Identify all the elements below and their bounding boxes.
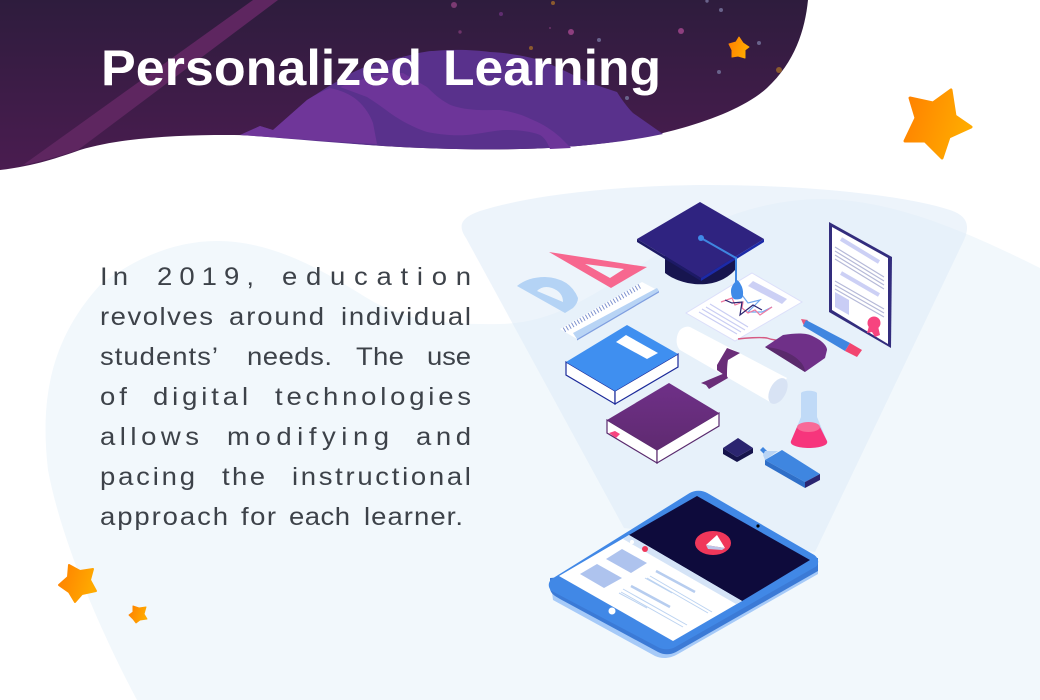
icon: protractor	[517, 277, 578, 313]
background blob	[46, 199, 1040, 700]
title: Personalized	[101, 40, 422, 96]
body paragraph: students’	[100, 342, 218, 371]
body paragraph: pacing	[100, 462, 195, 491]
body paragraph: The	[356, 342, 404, 371]
purple hills	[240, 50, 663, 149]
icon: ruler	[560, 282, 659, 340]
body paragraph: learner.	[364, 502, 463, 531]
tablet shadow	[552, 566, 818, 658]
article images	[606, 549, 647, 573]
body paragraph: needs.	[247, 342, 332, 371]
tablet side	[550, 558, 818, 654]
icon: eraser	[723, 438, 753, 462]
icon: purple book	[607, 383, 719, 463]
body paragraph: In	[100, 262, 128, 291]
icon: blue book	[566, 325, 678, 404]
play button	[695, 531, 731, 555]
body paragraph: around	[229, 302, 324, 331]
icon: diploma scroll	[677, 327, 792, 407]
body paragraph: allows	[100, 422, 199, 451]
body paragraph: modifying	[227, 422, 389, 451]
body paragraph: approach	[100, 502, 228, 531]
star: large top right	[905, 90, 971, 158]
icon: graph paper	[686, 273, 802, 341]
icon: tablet	[550, 492, 818, 658]
body paragraph: individual	[341, 302, 471, 331]
title: Learning	[443, 40, 661, 96]
tablet article area	[559, 535, 742, 641]
icon: mouse	[738, 334, 827, 372]
body paragraph: of	[100, 382, 128, 411]
star dots	[451, 0, 782, 100]
body paragraph: 2019,	[157, 262, 254, 291]
body paragraph: revolves	[100, 302, 213, 331]
icon: set square	[549, 252, 647, 288]
icon: marker	[760, 447, 820, 488]
tablet video area	[629, 496, 810, 601]
star: lower left small	[129, 606, 147, 623]
article text lines	[631, 571, 695, 607]
body paragraph: each	[289, 502, 350, 531]
body paragraph	[100, 262, 471, 531]
body paragraph: use	[427, 342, 471, 371]
body paragraph: for	[241, 502, 276, 531]
body paragraph: instructional	[292, 462, 471, 491]
icon: certificate	[829, 222, 892, 348]
star: lower left large	[59, 565, 96, 602]
body paragraph: digital	[153, 382, 248, 411]
diagonal stripe	[23, 0, 278, 165]
star: header small	[729, 37, 749, 58]
body paragraph: the	[222, 462, 265, 491]
body paragraph: education	[282, 262, 471, 291]
header banner	[0, 0, 808, 170]
body paragraph: technologies	[275, 382, 471, 411]
icon: graduation cap	[637, 202, 764, 299]
icon: flask	[791, 391, 827, 448]
icon: pencil	[801, 319, 862, 357]
body paragraph: and	[416, 422, 471, 451]
light beam	[462, 185, 967, 552]
tablet body	[550, 492, 817, 648]
